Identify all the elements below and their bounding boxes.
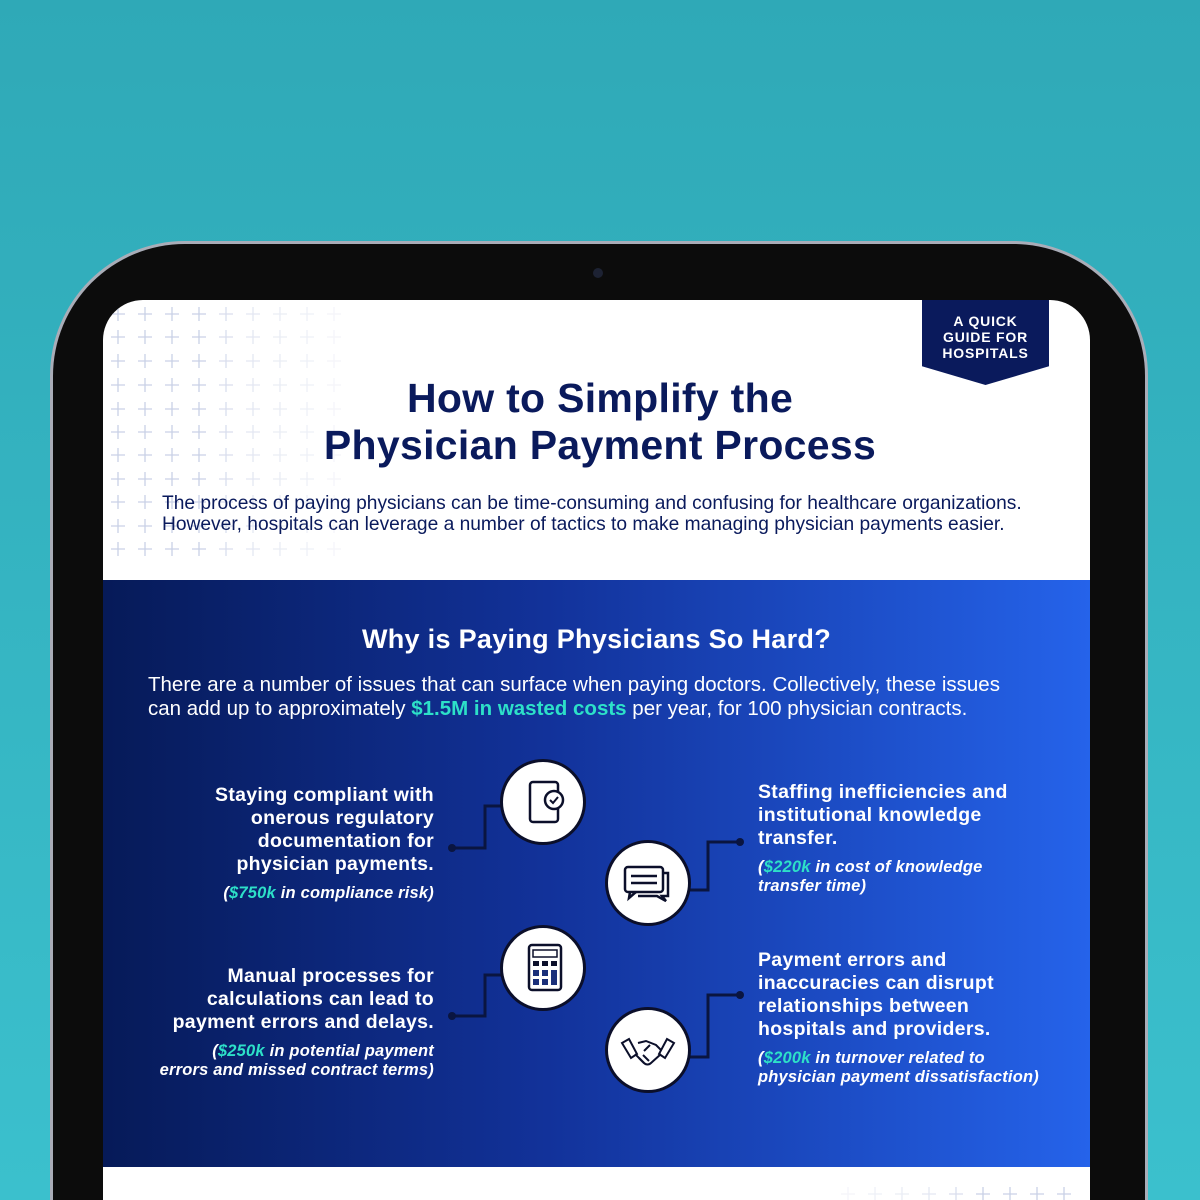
title xyxy=(324,375,876,468)
text: payment errors: hospitals and providers. xyxy=(758,1018,991,1040)
text: payment errors: physician payment dissatisfaction) xyxy=(758,1068,1039,1086)
text: staffing: ($220k in cost of knowledge xyxy=(758,858,983,876)
text: staffing xyxy=(758,781,1008,895)
icon: handshake xyxy=(605,1007,691,1093)
tablet xyxy=(50,241,1148,1200)
text: compliance: onerous regulatory xyxy=(251,807,434,829)
text: compliance: physician payments. xyxy=(236,853,434,875)
text: compliance: Staying compliant with xyxy=(215,784,434,806)
icon: calculator xyxy=(500,925,586,1011)
text: staffing: transfer. xyxy=(758,827,838,849)
text: payment errors: relationships between xyxy=(758,995,969,1017)
text: manual processes: calculations can lead to xyxy=(207,988,434,1010)
text: staffing: institutional knowledge xyxy=(758,804,982,826)
text: manual processes: Manual processes for xyxy=(228,965,434,987)
text: manual processes xyxy=(160,965,434,1079)
paragraph: can add up to approximately $1.5M in wasted costs per year, for 100 physician contracts. xyxy=(148,697,967,720)
heading: Why is Paying Physicians So Hard? xyxy=(362,624,831,654)
panel: why is it hard xyxy=(103,580,1090,1167)
text: payment errors: Payment errors and xyxy=(758,949,947,971)
text: compliance xyxy=(215,784,434,902)
paragraph xyxy=(148,673,1000,720)
text: manual processes: errors and missed contract terms) xyxy=(160,1061,434,1079)
text: payment errors xyxy=(758,949,1039,1086)
intro text: The process of paying physicians can be time-consuming and confusing for healthcare organizations. xyxy=(162,493,1022,514)
text: compliance: documentation for xyxy=(258,830,434,852)
intro text: However, hospitals can leverage a number of tactics to make managing physician payments easier. xyxy=(162,514,1005,535)
text: staffing: Staffing inefficiencies and xyxy=(758,781,1008,803)
badge xyxy=(922,300,1049,385)
badge: HOSPITALS xyxy=(942,345,1029,361)
text: payment errors: ($200k in turnover related to xyxy=(758,1049,985,1067)
badge: GUIDE FOR xyxy=(943,329,1028,345)
title: Physician Payment Process xyxy=(324,422,876,468)
text: payment errors: inaccuracies can disrupt xyxy=(758,972,994,994)
paragraph: There are a number of issues that can surface when paying doctors. Collectively, these issues xyxy=(148,673,1000,696)
title: How to Simplify the xyxy=(407,375,793,421)
icon: tablet check xyxy=(500,759,586,845)
text: manual processes: ($250k in potential payment xyxy=(212,1042,434,1060)
text: compliance: ($750k in compliance risk) xyxy=(223,884,434,902)
intro text xyxy=(162,493,1022,535)
camera xyxy=(593,268,603,278)
badge: A QUICK xyxy=(953,313,1018,329)
icon: chat xyxy=(605,840,691,926)
text: staffing: transfer time) xyxy=(758,877,866,895)
text: manual processes: payment errors and delays. xyxy=(173,1011,434,1033)
screen xyxy=(103,300,1090,1200)
